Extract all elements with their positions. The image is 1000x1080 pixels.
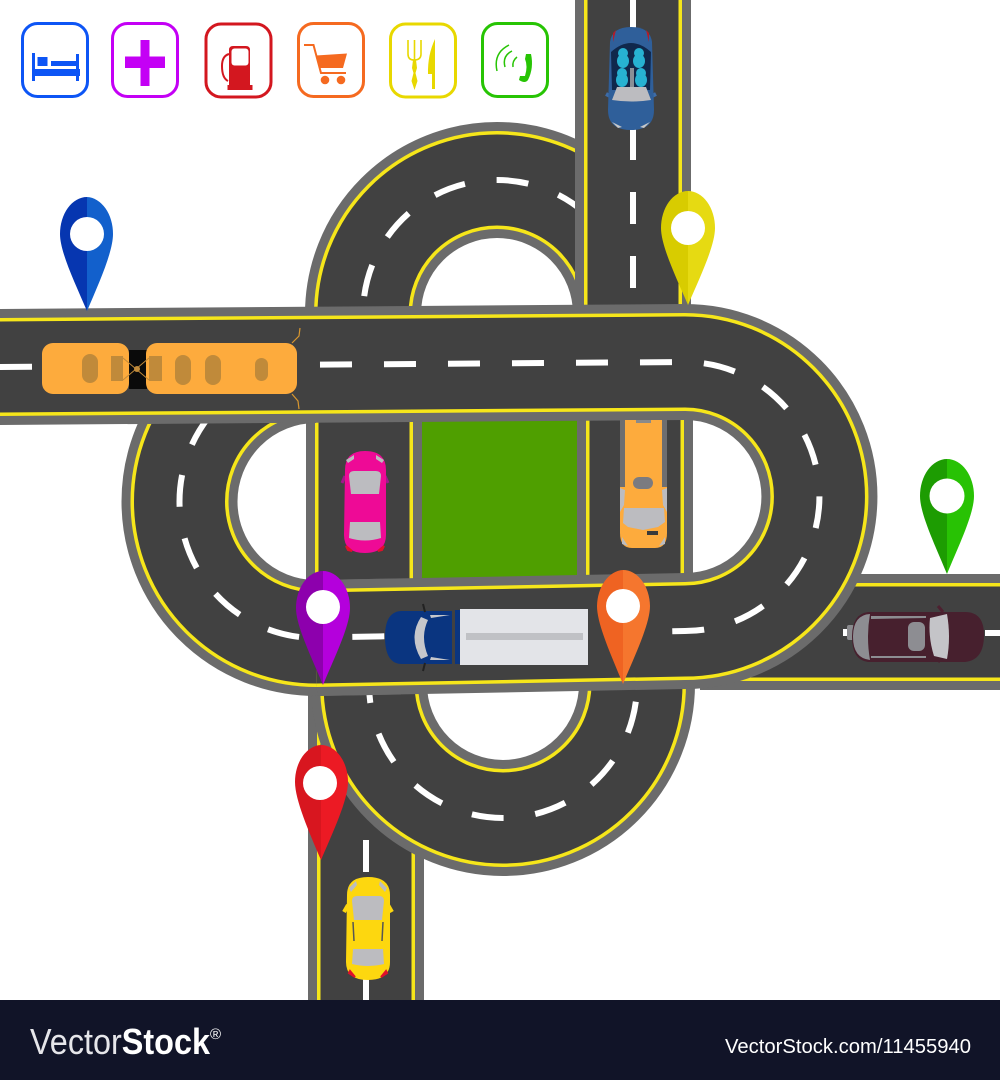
vehicle: pink car [342, 451, 388, 553]
road: inner right connector [577, 400, 693, 610]
vehicle: vertical orange bus [620, 420, 667, 548]
road: bottom ring loop [369, 660, 637, 818]
footer logo: registered mark: ® [210, 1026, 221, 1043]
footer image id: VectorStock.com/11455940 [725, 1036, 971, 1058]
pin: orange [597, 570, 650, 684]
icon: fork and knife [390, 24, 456, 97]
icon: medical cross [112, 24, 178, 96]
pin: yellow [661, 191, 715, 305]
pin: purple [296, 571, 350, 685]
icon: hotel bed [22, 24, 88, 96]
footer bar [0, 1000, 1000, 1080]
icon: fuel pump [206, 24, 271, 97]
road: north vertical road [575, 0, 691, 340]
pin: red [295, 745, 348, 860]
green lawn [422, 415, 577, 585]
road: main horizontal road with right loop [0, 362, 819, 638]
road: inner left connector [306, 400, 422, 610]
road: top ring loop [363, 180, 631, 340]
pin: blue [60, 197, 113, 311]
vehicle: dark red car [843, 606, 984, 662]
pin: green [920, 459, 974, 574]
vehicle: articulated orange bus [42, 328, 300, 409]
road: east horizontal road [700, 632, 1000, 633]
road: south vertical road [308, 680, 424, 1002]
icon: phone with signal [482, 24, 548, 96]
vehicle: blue truck with white trailer [385, 604, 588, 671]
footer logo: VectorStock: VectorStock [30, 1021, 211, 1062]
vehicle: yellow car [344, 877, 392, 980]
vehicle: blue convertible [606, 27, 656, 130]
road: left loop [180, 365, 400, 638]
icon: shopping cart [298, 24, 364, 96]
